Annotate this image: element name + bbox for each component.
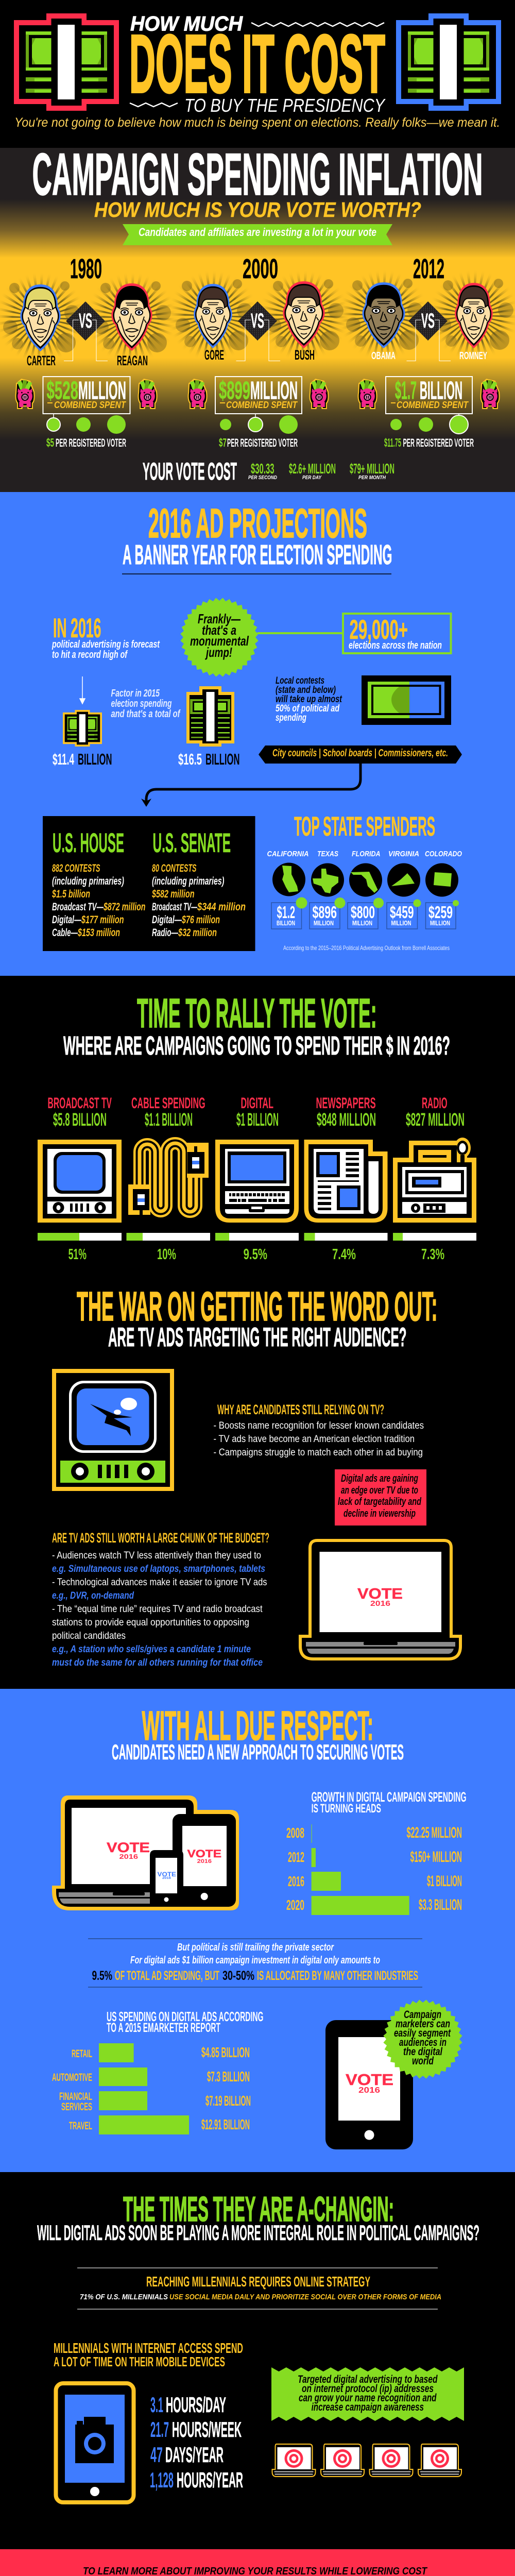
section: 2016 ad projections xyxy=(0,492,515,976)
factor in 2015 text xyxy=(111,688,181,720)
per voter 2012: $11.75 xyxy=(384,436,401,449)
per voter circles 1980 xyxy=(47,414,126,434)
icon: phone vote 2016: 2016 xyxy=(358,2086,380,2095)
factor in 2015 text: Factor in 2015 xyxy=(111,688,160,699)
icon: cable xyxy=(128,1143,209,1216)
tv ads worth budget text: e.g. Simultaneous use of laptops, smartphones, tablets xyxy=(52,1564,265,1574)
column: cable spending xyxy=(127,1095,210,1263)
column: newspapers: 7.4% xyxy=(332,1246,356,1263)
bar row automotive: AUTOMOTIVE xyxy=(52,2072,92,2083)
in 2016 forecast: IN 2016 xyxy=(53,613,101,643)
icon: half filled screen xyxy=(362,675,451,725)
stat: days per year xyxy=(150,2443,224,2467)
versus diamond 2012 xyxy=(407,301,451,361)
callout: digital ads gaining an edge: decline in viewership xyxy=(344,1508,416,1519)
amount: 11.4 billion: BILLION xyxy=(78,750,112,768)
column: digital: DIGITAL xyxy=(241,1095,273,1112)
house column: 882 CONTESTS xyxy=(52,862,100,874)
state: Colorado xyxy=(425,850,462,929)
spend box 2012: COMBINED SPENT xyxy=(397,400,469,410)
millennials heading xyxy=(54,2340,243,2369)
bar chart: US spending on digital ads: TO A 2015 EMARKETER REPORT xyxy=(107,2021,220,2035)
state: Colorado: $259 xyxy=(428,903,453,922)
column: radio xyxy=(393,1095,476,1263)
zigzag top xyxy=(251,23,384,26)
icon: newspaper xyxy=(304,1140,387,1223)
tv ads worth budget text xyxy=(52,1530,269,1668)
state: California: BILLION xyxy=(277,919,295,927)
icon: laptop vote 2016: 2016 xyxy=(370,1599,390,1608)
state: Texas: $896 xyxy=(312,903,337,922)
private sector comparison: OF TOTAL AD SPENDING, BUT xyxy=(115,1969,219,1983)
senate column: $582 million xyxy=(151,888,195,900)
column: broadcast tv xyxy=(38,1095,122,1263)
state: Texas: MILLION xyxy=(314,919,334,927)
factor in 2015 text: election spending xyxy=(111,698,172,709)
column: broadcast tv: BROADCAST TV xyxy=(47,1095,112,1112)
in 2016 forecast: political advertising is forecast xyxy=(52,639,160,650)
tv ads worth budget text: - Audiences watch TV less attentively than they used to xyxy=(52,1550,261,1561)
house column: U.S. HOUSE xyxy=(53,828,124,858)
icon: phone with camera xyxy=(56,2383,134,2502)
local contests text: spending xyxy=(276,713,306,723)
bar row 2008 xyxy=(286,1824,462,1843)
state: California xyxy=(267,850,309,929)
icon: red dollar bill xyxy=(16,16,116,108)
tv ads worth budget text: e.g., DVR, on-demand xyxy=(52,1590,134,1601)
senate column: $344 million xyxy=(197,901,246,913)
subheading: how much is your vote worth: HOW MUCH IS YOUR VOTE WORTH? xyxy=(94,198,421,222)
house column: $177 million xyxy=(81,914,124,926)
bar row 2016 xyxy=(288,1872,462,1891)
curved black arrow xyxy=(141,764,360,807)
stat: hours per year: 1,128 xyxy=(150,2468,174,2492)
senate column: U.S. SENATE xyxy=(152,828,231,858)
icon: tall bill xyxy=(188,688,233,745)
tv ads worth budget text: must do the same for all others running for that office xyxy=(52,1657,263,1668)
tv ads worth budget text: - The “equal time rule” requires TV and radio broadcast xyxy=(52,1604,263,1615)
why still relying on tv: - Boosts name recognition for lesser known candidates xyxy=(213,1420,424,1431)
burst: campaign marketers: world xyxy=(412,2055,434,2067)
stat: hours per day xyxy=(150,2393,226,2417)
spend box 2000: $899 xyxy=(219,377,250,405)
state: Florida: MILLION xyxy=(352,919,372,927)
icon: devices laptop tablet phone: VOTE xyxy=(158,1871,176,1878)
house column: Digital— xyxy=(52,914,82,926)
callout: digital ads gaining an edge: an edge over TV due to xyxy=(341,1485,418,1496)
icon: phone vote 2016 xyxy=(325,2020,413,2149)
section: campaign spending inflation xyxy=(0,142,515,492)
portrait: Reagan xyxy=(111,283,152,351)
reaching millennials callout: USE SOCIAL MEDIA DAILY AND PRIORITIZE SOCIAL OVER OTHER FORMS OF MEDIA xyxy=(169,2293,441,2301)
callout: targeted digital advertising xyxy=(271,2367,464,2421)
state: Colorado: MILLION xyxy=(430,919,450,927)
year 1980: 1980 xyxy=(70,253,102,284)
section: the times they are a-changin: HOURS/YEAR xyxy=(177,2468,243,2492)
column: newspapers: $848 MILLION xyxy=(317,1110,376,1130)
cost per day: PER DAY xyxy=(302,475,322,481)
name: Obama: OBAMA xyxy=(371,350,396,362)
private sector comparison: For digital ads $1 billion campaign investment in digital only amounts to xyxy=(130,1955,380,1966)
state: California: CALIFORNIA xyxy=(267,850,309,858)
state: Virginia: $459 xyxy=(390,903,414,922)
amount: 16.5 billion: BILLION xyxy=(205,750,240,768)
column: cable spending: $1.1 BILLION xyxy=(145,1110,193,1130)
cost per day xyxy=(289,461,336,481)
bar chart: US spending on digital ads xyxy=(52,2009,264,2134)
house column: $872 million xyxy=(103,901,145,913)
senate column: $76 million xyxy=(181,914,220,926)
amount: 11.4 billion: $11.4 xyxy=(53,750,74,768)
versus diamond 1980: VS xyxy=(79,310,92,332)
column: newspapers: NEWSPAPERS xyxy=(316,1095,376,1112)
callout: targeted digital advertising: on internet protocol (ip) addresses xyxy=(302,2383,434,2395)
why still relying on tv: - TV ads have become an American election tradition xyxy=(213,1434,415,1445)
amount: 16.5 billion xyxy=(178,750,240,768)
spend box 2000 xyxy=(215,377,302,414)
section: campaign spending inflation: $2.6+ MILLION xyxy=(289,461,336,477)
bar chart: growth in digital campaign spending: IS TURNING HEADS xyxy=(312,1802,381,1816)
section: campaign spending inflation: MILLION xyxy=(250,377,298,405)
per voter 2012 xyxy=(384,436,474,449)
versus diamond 1980 xyxy=(64,301,108,361)
house column: Cable— xyxy=(52,927,78,939)
icon: devices laptop tablet phone: 2016 xyxy=(197,1858,212,1865)
stat: hours per day: 3.1 xyxy=(150,2393,163,2417)
elections box: 29,000+ xyxy=(349,615,408,645)
bar chart: US spending on digital ads: US SPENDING ON DIGITAL ADS ACCORDING xyxy=(107,2009,264,2024)
burst: campaign marketers: audiences in xyxy=(399,2037,447,2048)
piggy banks xyxy=(15,379,500,409)
versus diamond 2000 xyxy=(236,301,280,361)
burst: frankly a monumental jump xyxy=(180,598,259,677)
burst: campaign marketers: the digital xyxy=(403,2046,443,2058)
state: Virginia: VIRGINIA xyxy=(388,850,419,858)
state: Florida: FLORIDA xyxy=(352,850,380,858)
section: the times they are a-changin: HOURS/WEEK xyxy=(172,2417,242,2442)
icon: devices laptop tablet phone: 2016 xyxy=(119,1853,138,1860)
local contests text: 50% of political ad xyxy=(276,703,339,714)
local contests text: will take up almost xyxy=(276,694,342,705)
senate column: Digital— xyxy=(152,914,182,926)
zigzag bottom xyxy=(130,103,178,107)
column: broadcast tv: 51% xyxy=(68,1246,87,1263)
bar chart: US spending on digital ads: $7.3 BILLION xyxy=(207,2069,250,2084)
callout: targeted digital advertising: increase campaign awareness xyxy=(312,2401,424,2413)
column: digital: 9.5% xyxy=(244,1246,267,1263)
icon: devices laptop tablet phone: VOTE xyxy=(187,1848,221,1860)
callout: targeted digital advertising: can grow your name recognition and xyxy=(299,2392,437,2404)
stat: hours per year xyxy=(150,2468,243,2492)
tv ads worth budget text: political candidates xyxy=(52,1631,126,1641)
reaching millennials callout xyxy=(77,2268,441,2309)
icon: television xyxy=(38,1140,122,1223)
burst: frankly a monumental jump: monumental xyxy=(190,633,249,649)
panel: US house and senate xyxy=(43,816,255,951)
house column: $153 million xyxy=(77,927,120,939)
icon: blue dollar bill xyxy=(399,16,499,108)
in 2016 forecast: to hit a record high of xyxy=(52,649,128,660)
private sector comparison: 9.5% xyxy=(92,1969,112,1983)
bar row financial services: SERVICES xyxy=(61,2101,92,2113)
bar row retail xyxy=(72,2043,250,2062)
green ribbon xyxy=(123,224,392,245)
stat: hours per week: 21.7 xyxy=(150,2417,169,2442)
callout: digital ads gaining an edge: Digital ads are gaining xyxy=(341,1473,418,1484)
ribbon: local offices xyxy=(259,745,462,764)
spend box 2012: $1.7 xyxy=(395,377,417,405)
bar row automotive xyxy=(52,2067,250,2086)
icon: laptop vote 2016: VOTE xyxy=(357,1586,403,1602)
local contests text: Local contests xyxy=(276,675,324,686)
state: Virginia: MILLION xyxy=(391,919,411,927)
section: call to action xyxy=(0,2549,515,2576)
bar row travel: TRAVEL xyxy=(69,2120,92,2132)
why still relying on tv: - Campaigns struggle to match each other in ad buying xyxy=(213,1447,423,1458)
bar row 2020: 2020 xyxy=(286,1897,304,1913)
why still relying on tv xyxy=(213,1402,424,1458)
icon: small bill xyxy=(64,711,101,745)
senate column: Broadcast TV— xyxy=(152,901,198,913)
burst: campaign marketers: easily segment xyxy=(394,2027,451,2039)
burst: campaign marketers xyxy=(383,1999,462,2079)
section: with all due respect xyxy=(0,1689,515,2172)
in 2016 forecast xyxy=(52,613,160,660)
senate column: Radio— xyxy=(152,927,179,939)
section: campaign spending inflation: PER REGISTERED VOTER xyxy=(56,436,126,449)
spend box 2000: COMBINED SPENT xyxy=(226,400,298,410)
elections box: elections across the nation xyxy=(349,640,442,651)
per voter 1980 xyxy=(46,436,126,449)
column: radio: RADIO xyxy=(422,1095,448,1112)
burst: campaign marketers: Campaign xyxy=(404,2009,441,2021)
amount: 11.4 billion xyxy=(53,750,112,768)
bar chart: US spending on digital ads: $4.85 BILLION xyxy=(201,2044,250,2060)
state: California: $1.2 xyxy=(277,903,295,922)
versus diamond 2012: VS xyxy=(421,310,435,332)
state: Texas xyxy=(310,850,345,929)
state: Colorado: COLORADO xyxy=(425,850,462,858)
section: the times they are a-changin: DAYS/YEAR xyxy=(165,2443,224,2467)
icon: laptop vote 2016 xyxy=(300,1540,460,1659)
house column: (including primaries) xyxy=(52,875,124,887)
state: Florida: $800 xyxy=(351,903,375,922)
private sector comparison: 30-50% xyxy=(222,1969,254,1983)
title: to buy the presidency: TO BUY THE PRESIDENCY xyxy=(184,95,386,116)
section: the times they are a-changin xyxy=(0,2172,515,2549)
state: Florida xyxy=(348,850,384,929)
portrait: Obama xyxy=(363,282,405,348)
column: radio: 7.3% xyxy=(421,1246,444,1263)
stat: hours per week xyxy=(150,2417,242,2442)
icon: devices laptop tablet phone xyxy=(52,1795,239,1910)
portrait: Gore xyxy=(194,284,232,348)
bar chart: US spending on digital ads: $7.19 BILLION xyxy=(205,2093,251,2109)
name: Reagan: REAGAN xyxy=(117,353,148,368)
section: with all due respect: $1 BILLION xyxy=(427,1873,462,1890)
reaching millennials callout: 71% OF U.S. MILLENNIALS xyxy=(80,2293,168,2301)
year 2012: 2012 xyxy=(413,253,444,284)
icon: laptop xyxy=(215,1140,299,1223)
cost per second: PER SECOND xyxy=(248,475,277,481)
versus diamond 2000: VS xyxy=(251,310,264,332)
column: digital xyxy=(215,1095,299,1263)
tv ads worth budget text: - Technological advances make it easier to ignore TV ads xyxy=(52,1577,267,1588)
column: broadcast tv: $5.8 BILLION xyxy=(53,1110,107,1130)
bar row 2008: 2008 xyxy=(286,1825,304,1841)
senate column: $32 million xyxy=(178,927,217,939)
portrait: Bush xyxy=(283,281,325,348)
burst: frankly a monumental jump: jump! xyxy=(205,645,232,660)
name: Romney: ROMNEY xyxy=(459,350,487,362)
callout: digital ads gaining an edge: lack of targetability and xyxy=(338,1496,422,1507)
millennials heading: A LOT OF TIME ON THEIR MOBILE DEVICES xyxy=(54,2354,225,2369)
bar row 2012: 2012 xyxy=(288,1849,304,1865)
private sector comparison xyxy=(88,1939,422,1987)
house column: Broadcast TV— xyxy=(52,901,104,913)
local contests text: (state and below) xyxy=(276,685,336,696)
per voter 1980: $5 xyxy=(46,436,54,449)
house column: $1.5 billion xyxy=(52,888,90,900)
name: Bush: BUSH xyxy=(295,347,315,363)
per voter 2000: $7 xyxy=(219,436,227,449)
private sector comparison: But political is still trailing the private sector xyxy=(177,1942,334,1953)
icon: devices laptop tablet phone: VOTE xyxy=(107,1840,150,1855)
bar row 2012 xyxy=(288,1848,462,1867)
per voter circles 2000 xyxy=(220,414,298,434)
factor in 2015 text: and that's a total of xyxy=(111,708,181,720)
local contests text xyxy=(276,675,342,723)
cost per month: PER MONTH xyxy=(358,475,386,481)
amount: 16.5 billion: $16.5 xyxy=(178,750,202,768)
state: Texas: TEXAS xyxy=(317,850,338,858)
callout: digital ads gaining an edge xyxy=(335,1469,426,1526)
title: how much: HOW MUCH xyxy=(130,12,243,35)
section: campaign spending inflation: YOUR VOTE COST xyxy=(143,457,237,485)
section: campaign spending inflation: $79+ MILLION xyxy=(350,461,394,477)
senate column: 80 CONTESTS xyxy=(152,862,197,874)
column: cable spending: CABLE SPENDING xyxy=(131,1095,205,1112)
cost per second xyxy=(248,461,277,481)
icon: phone vote 2016: VOTE xyxy=(346,2071,393,2089)
millennials heading: MILLENNIALS WITH INTERNET ACCESS SPEND xyxy=(54,2340,243,2356)
bar chart: US spending on digital ads: $12.91 BILLION xyxy=(201,2116,250,2132)
column: newspapers xyxy=(304,1095,387,1263)
column: cable spending: 10% xyxy=(157,1246,176,1263)
icon: devices laptop tablet phone: 2016 xyxy=(162,1877,171,1880)
section: campaign spending inflation: MILLION xyxy=(78,377,126,405)
cost per second: $30.33 xyxy=(251,461,274,477)
icons: laptops with targets xyxy=(272,2444,461,2477)
source note: According to the 2015–2016 Political Advertising Outlook from Borrell Associates xyxy=(283,944,450,952)
portrait: Carter xyxy=(20,284,61,351)
section: with all due respect: $3.3 BILLION xyxy=(419,1896,462,1913)
tv ads worth budget text: e.g., A station who sells/gives a candidate 1 minute xyxy=(52,1644,251,1655)
spend box 2012 xyxy=(386,377,472,414)
section: campaign spending inflation: GORE xyxy=(204,347,224,363)
bar row retail: RETAIL xyxy=(72,2048,92,2060)
sunburst rays behind portraits xyxy=(3,279,513,352)
tv ads worth budget text: stations to provide equal opportunities to opposing xyxy=(52,1617,249,1628)
per voter 2000 xyxy=(219,436,298,449)
state: Virginia xyxy=(387,850,421,929)
column: digital: $1 BILLION xyxy=(236,1110,279,1130)
connector line xyxy=(258,632,342,634)
spend box 1980 xyxy=(43,377,130,414)
green ribbon: Candidates and affiliates are investing a lot in your vote xyxy=(139,226,376,239)
bar row 2016: 2016 xyxy=(288,1873,304,1889)
callout: targeted digital advertising: Targeted digital advertising to based xyxy=(298,2374,438,2385)
spend box 1980: $528 xyxy=(46,377,78,405)
bar row 2020 xyxy=(286,1896,462,1915)
tv ads worth budget text: ARE TV ADS STILL WORTH A LARGE CHUNK OF THE BUDGET? xyxy=(52,1530,269,1546)
spend box 1980: COMBINED SPENT xyxy=(54,400,127,410)
icon: retro television with bird xyxy=(54,1371,172,1489)
bar row financial services xyxy=(59,2091,251,2113)
house column xyxy=(52,828,145,939)
per voter circles 2012 xyxy=(390,414,468,434)
section: header xyxy=(0,0,515,148)
section: the times they are a-changin: HOURS/DAY xyxy=(166,2393,226,2417)
stat: days per year: 47 xyxy=(150,2443,163,2467)
section: time to rally the vote and war on getting the word out xyxy=(0,976,515,1689)
arrow down xyxy=(80,676,85,704)
burst: campaign marketers: marketers can xyxy=(396,2018,450,2030)
bar row financial services: FINANCIAL xyxy=(59,2091,92,2103)
bar chart: growth in digital campaign spending xyxy=(286,1789,467,1915)
portrait: Romney xyxy=(455,283,493,348)
year 2000: 2000 xyxy=(243,253,278,284)
bar row travel xyxy=(69,2115,250,2134)
cost per month xyxy=(350,461,394,481)
icon: radio xyxy=(393,1138,476,1223)
senate column xyxy=(151,828,246,939)
burst: frankly a monumental jump: Frankly— xyxy=(198,611,241,626)
burst: frankly a monumental jump: that's a xyxy=(202,622,236,638)
section: campaign spending inflation: PER REGISTERED VOTER xyxy=(227,436,298,449)
section: campaign spending inflation: CARTER xyxy=(27,353,56,368)
senate column: (including primaries) xyxy=(152,875,225,887)
